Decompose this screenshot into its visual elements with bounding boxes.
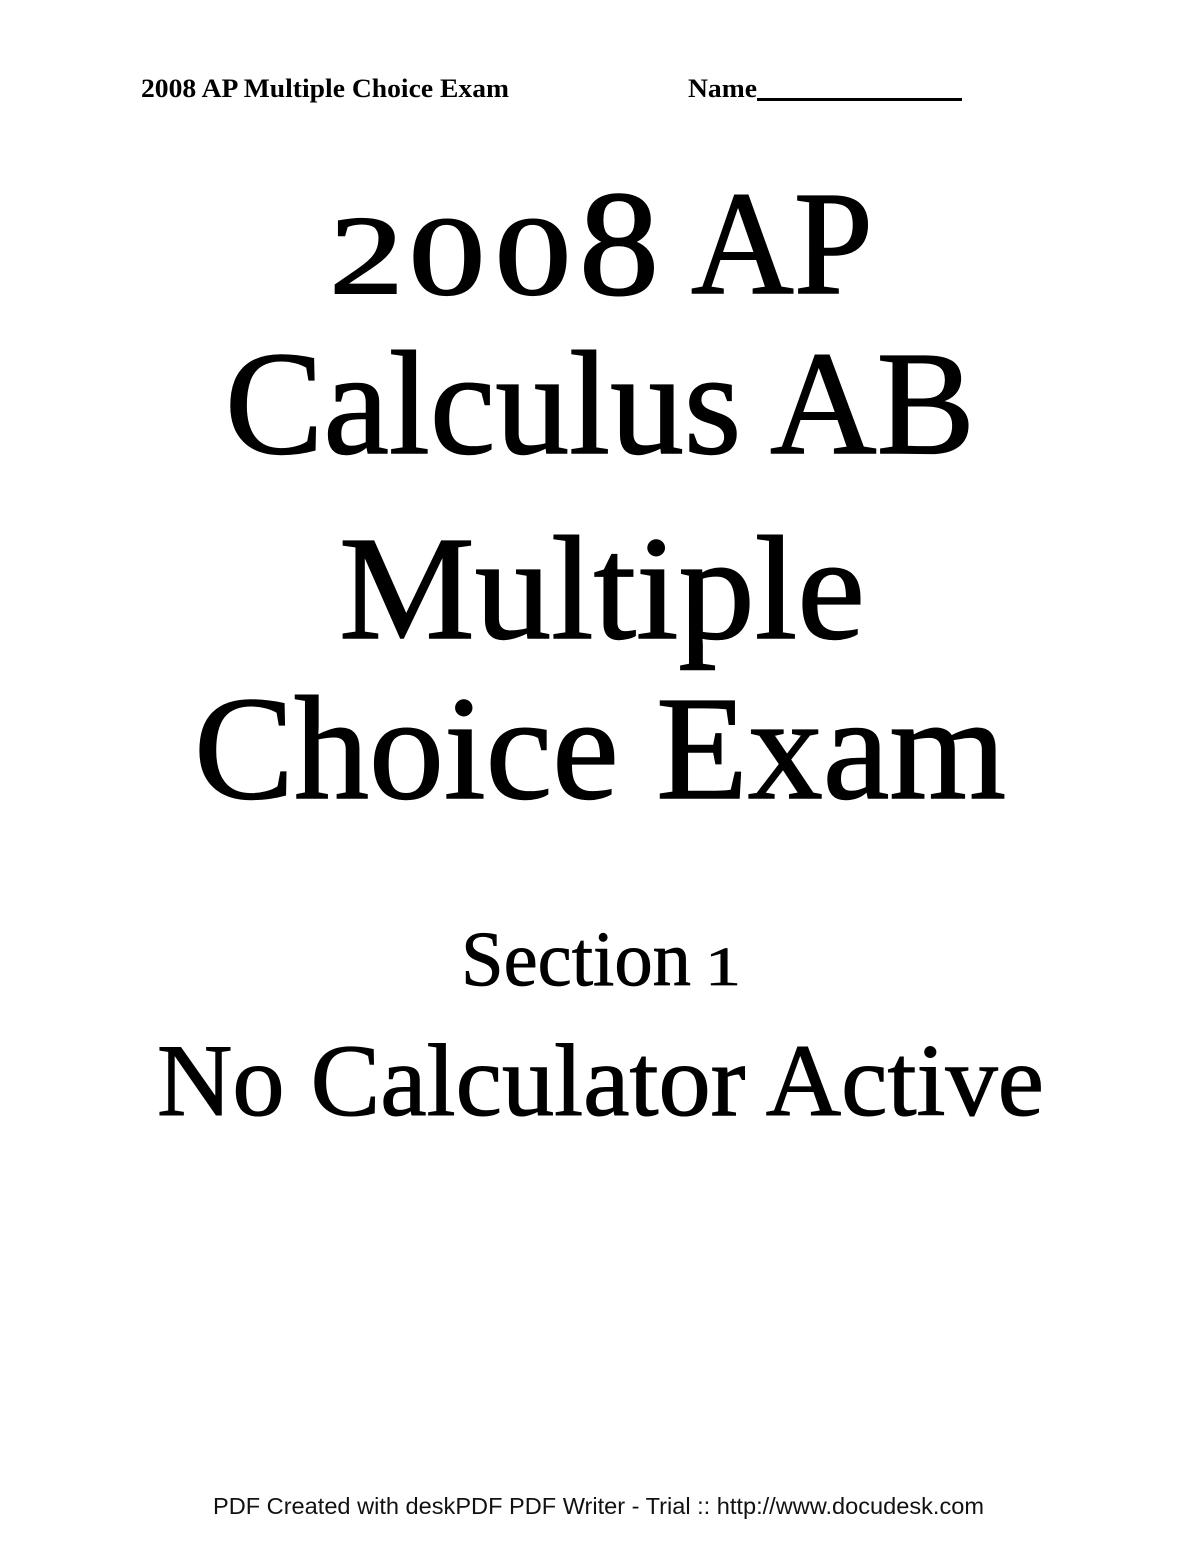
- title line: 2008 AP: 2: [330, 194, 404, 318]
- header: name field: Name: [688, 74, 757, 103]
- title line: 2008 AP: AP: [691, 162, 873, 326]
- title line: Calculus AB: Calculus AB: [225, 322, 975, 486]
- title line: 2008 AP: 0: [409, 195, 485, 319]
- title line: Choice Exam: Choice Exam: [194, 667, 1006, 831]
- footer: PDF writer notice: PDF Created with deskPDF PDF Writer - Trial :: http://www.docudesk.com: [213, 1493, 984, 1519]
- title line: Multiple: Multiple: [339, 507, 865, 671]
- title line: 2008 AP: [330, 161, 873, 327]
- subtitle: No Calculator Active: No Calculator Active: [157, 1024, 1044, 1138]
- title line: 2008 AP: 0: [495, 195, 571, 319]
- header: exam name: 2008 AP Multiple Choice Exam: [141, 74, 509, 103]
- subtitle: Section 1: 1: [705, 936, 741, 997]
- header: name field: [688, 74, 962, 103]
- subtitle: Section 1: Section: [461, 915, 691, 1002]
- title line: 2008 AP: 8: [579, 161, 659, 327]
